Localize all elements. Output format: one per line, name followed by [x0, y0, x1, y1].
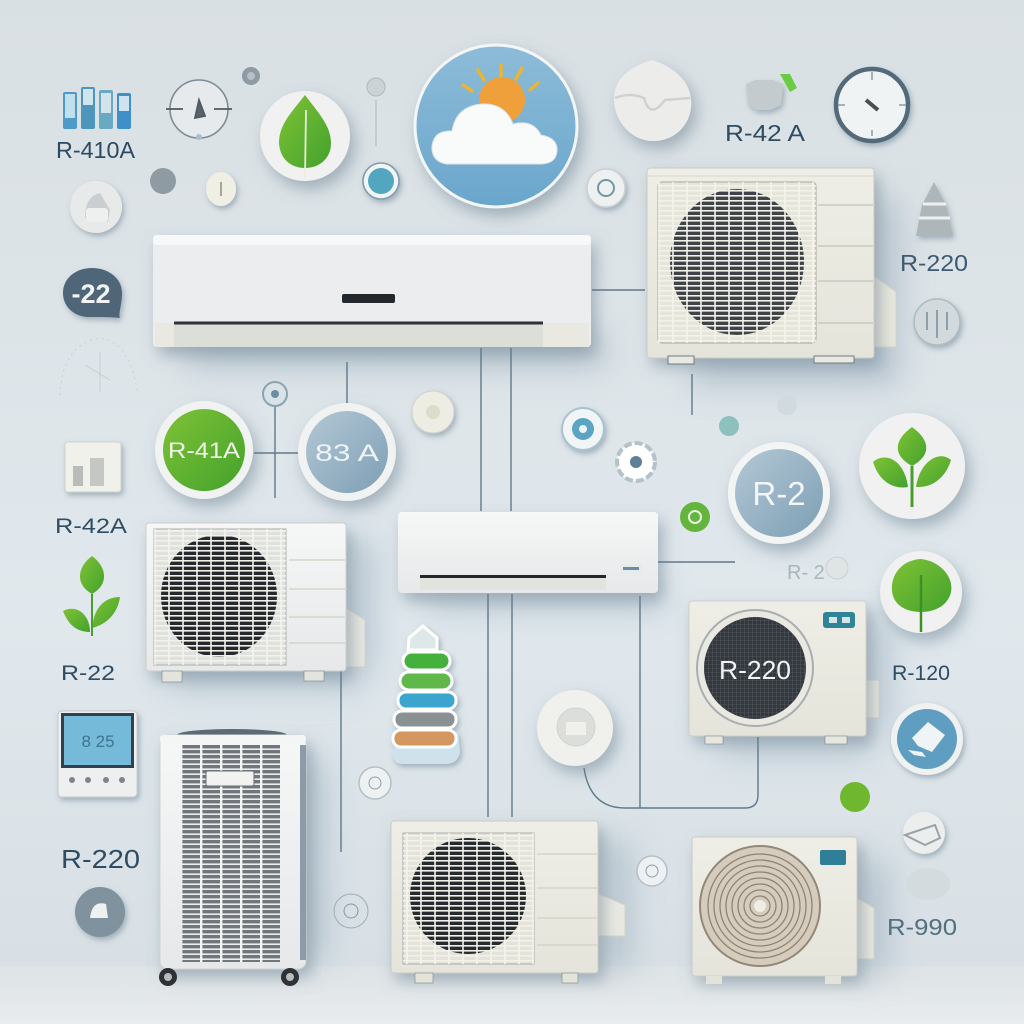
- icon: clock: [836, 69, 908, 141]
- label: R-220 top right: R-220: [900, 250, 968, 276]
- icon: blue crystal badge: [891, 703, 963, 775]
- label: faint R-20: [787, 557, 848, 584]
- outdoor unit: left middle: [146, 523, 365, 682]
- icon: gauge top left: [166, 80, 232, 140]
- icon: small green dot badge: [680, 502, 710, 532]
- tower condenser unit: [159, 729, 306, 986]
- small decorative dots top: [150, 67, 385, 206]
- icon: controller with screen: [58, 711, 137, 797]
- icon: small device with green: [746, 74, 797, 110]
- label: R-42A top right: R-42 A: [725, 120, 806, 146]
- label: R-220 lower left: R-220: [61, 844, 140, 874]
- outdoor unit: bottom center: [391, 821, 625, 983]
- connecting pipes: [254, 290, 758, 852]
- icon: small ring right of weather: [587, 169, 625, 207]
- small icons lower middle: [334, 767, 950, 928]
- icon: leaf badge right: [880, 551, 962, 633]
- badge: 83 A: 83 A: [315, 440, 379, 467]
- icon: teal ring middle: [562, 408, 604, 450]
- outdoor unit: bottom right tan fan: [692, 837, 874, 984]
- label: R-22 left: R-22: [61, 662, 115, 685]
- label: R-990: R-990: [887, 914, 957, 940]
- icon: white knob left: [70, 181, 122, 233]
- icon: green leaf badge top: [260, 91, 350, 181]
- icon: three-leaf sprout badge: [859, 413, 965, 519]
- badge: R-2: [728, 442, 830, 544]
- icon: small teal ring: [363, 163, 399, 199]
- label: R-220 on fan: R-220: [719, 655, 791, 685]
- small dots middle: [263, 382, 797, 436]
- label: faint R-20: R- 2: [787, 562, 825, 584]
- icon: glass badge right: [914, 299, 960, 345]
- outdoor unit: right middle with R-220: [689, 601, 879, 744]
- badge: R-2: R-2: [752, 475, 806, 512]
- icon: bar meter with R-410A: [56, 87, 136, 163]
- label: R-410A top left: R-410A: [56, 137, 136, 163]
- soft wall shadows: [170, 200, 900, 975]
- outdoor unit: top right: [647, 168, 896, 364]
- icon: white flower: [617, 443, 655, 481]
- icon: energy stack: [392, 626, 460, 764]
- icon: green sprout left: [63, 556, 120, 636]
- badge: R-41A green: R-41A: [168, 438, 240, 463]
- badge: -22: [63, 268, 122, 318]
- icon: round white thermostat: [537, 690, 613, 766]
- label: R-120 right: R-120: [892, 662, 950, 685]
- icon: weather sun and cloud badge: [415, 45, 577, 207]
- icon: white ornament top: [614, 60, 691, 141]
- icon: stacked cone right: [916, 182, 953, 236]
- indoor unit: middle wall split: [398, 512, 658, 593]
- label: R-42A left: R-42A: [55, 515, 127, 538]
- icon: controller with screen: 8 25: [81, 732, 115, 751]
- badge: -22: -22: [71, 279, 111, 309]
- indoor unit: large wall split: [153, 235, 591, 347]
- icon: wall outlet box: [65, 442, 121, 492]
- decorative faint sketch left: [60, 338, 138, 395]
- icon: round knob lower left: [75, 887, 125, 937]
- badge: 83 A: [298, 403, 396, 501]
- badge: R-41A green: [155, 401, 253, 499]
